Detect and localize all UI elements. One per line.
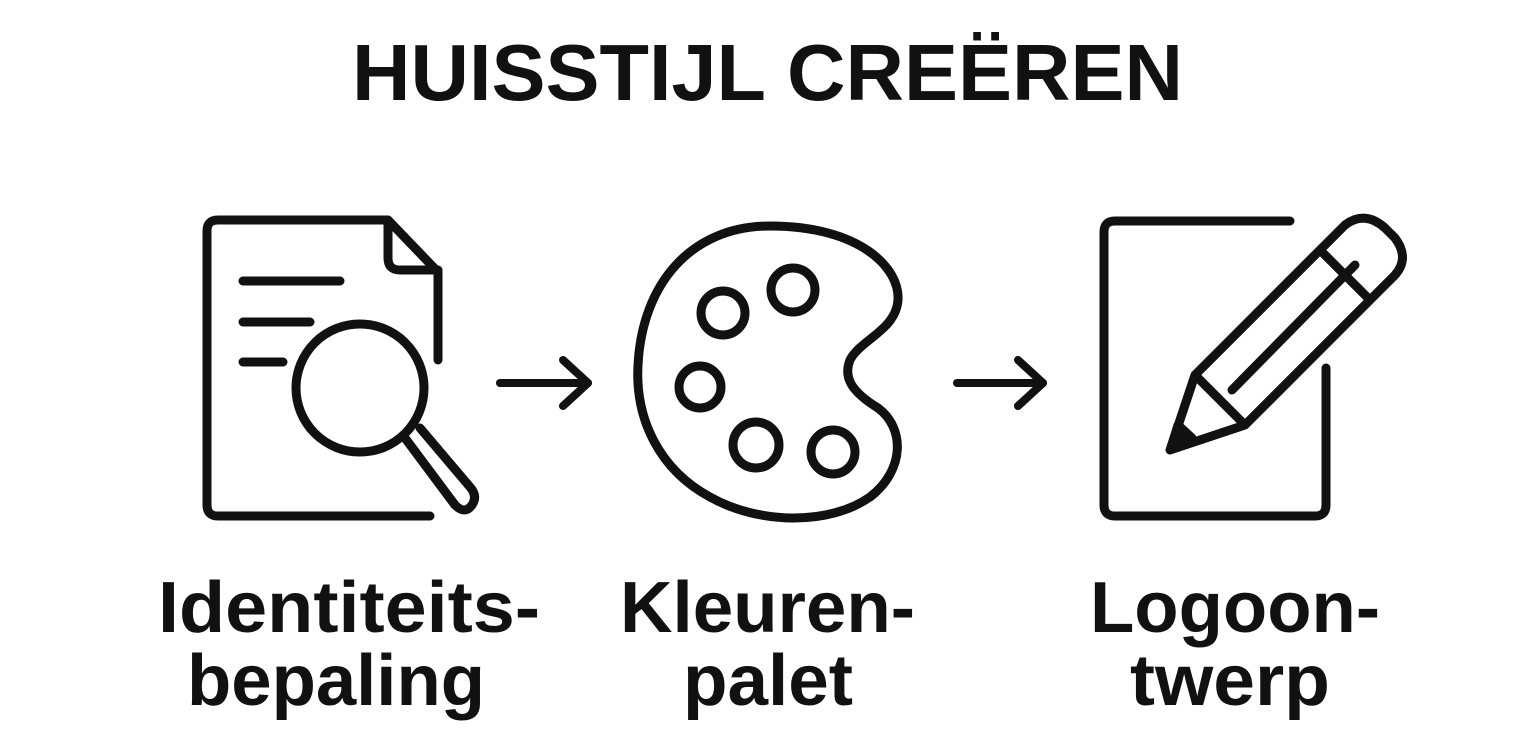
- arrow 1: [500, 360, 588, 406]
- label: step 2: Kleuren-: [620, 568, 915, 648]
- title: HUISSTIJL CREËREN: [352, 28, 1183, 117]
- label: step 1: Identiteits-: [158, 568, 540, 648]
- label: step 1: [158, 568, 540, 721]
- label: step 2: [620, 568, 915, 721]
- arrow 2: [957, 360, 1043, 406]
- label: step 3: twerp: [1130, 641, 1330, 721]
- label: step 1: bepaling: [187, 641, 485, 721]
- label: step 3: [1090, 568, 1380, 721]
- label: step 2: palet: [683, 641, 853, 721]
- icon: pencil on square: [1104, 218, 1402, 516]
- icon: palette: [638, 226, 898, 518]
- icon: document with magnifier: [207, 220, 475, 516]
- label: step 3: Logoon-: [1090, 568, 1380, 648]
